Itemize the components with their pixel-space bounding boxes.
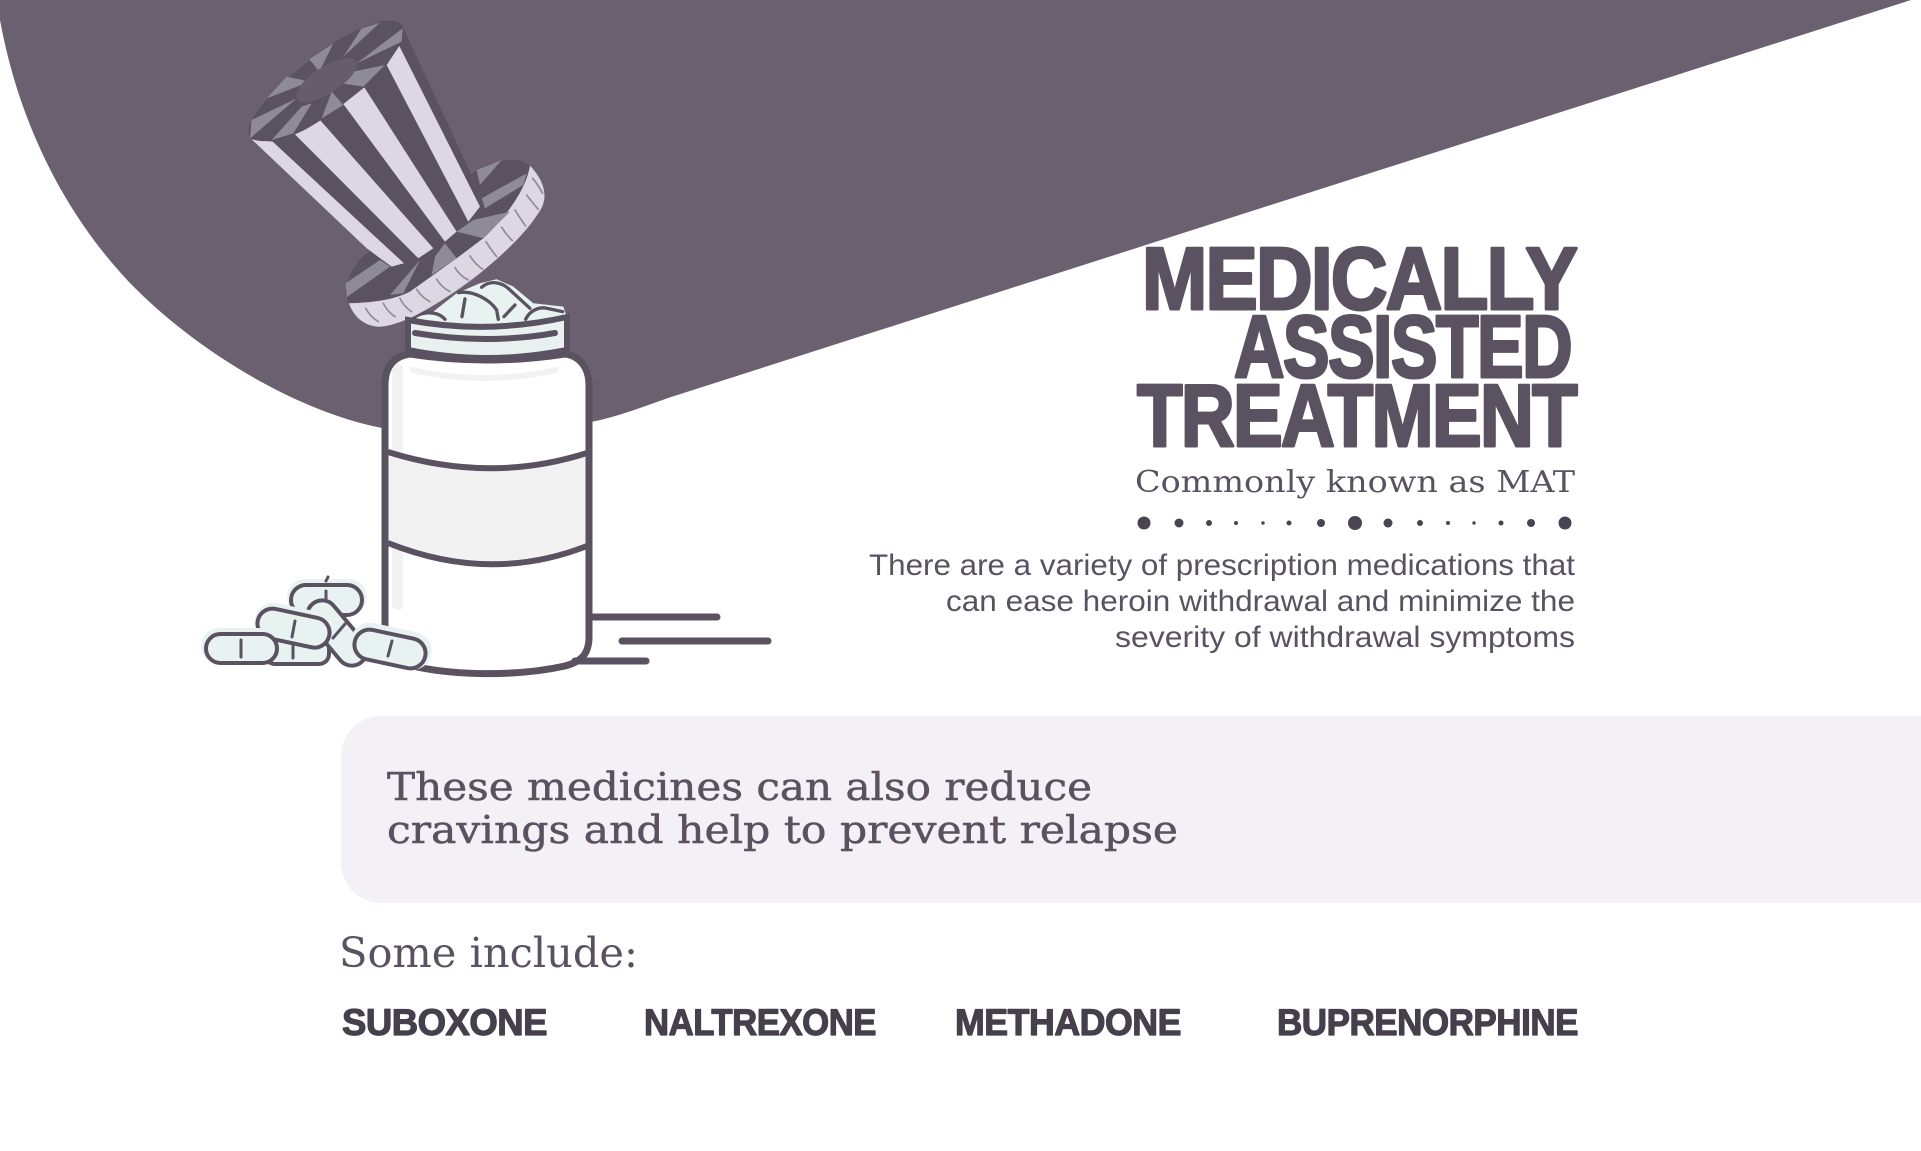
hat brim xyxy=(346,160,544,327)
heading: some include: Some include: xyxy=(339,929,638,977)
medication names: BUPRENORPHINE xyxy=(1277,1002,1578,1043)
icon: top hat xyxy=(249,21,544,327)
description text xyxy=(869,549,1576,654)
medication names: NALTREXONE xyxy=(644,1002,876,1043)
icon: spilled pills xyxy=(201,577,435,673)
medication names: SUBOXONE xyxy=(342,1002,547,1043)
title: MEDICALLY xyxy=(1142,229,1577,328)
medication names xyxy=(342,1002,1578,1043)
description text: severity of withdrawal symptoms xyxy=(1115,621,1575,654)
hat body xyxy=(251,27,482,267)
callout text: These medicines can also reduce xyxy=(387,765,1092,809)
hat crown top xyxy=(249,21,403,141)
description text: There are a variety of prescription medications that xyxy=(869,549,1576,582)
subtitle: Commonly known as MAT xyxy=(1135,465,1575,500)
motion lines xyxy=(575,617,768,661)
bottle cap xyxy=(408,317,567,358)
icon: pills in bottle opening xyxy=(410,279,567,328)
background swoosh xyxy=(0,0,1911,432)
medication names: METHADONE xyxy=(955,1002,1181,1043)
title: TREATMENT xyxy=(1137,366,1577,465)
icon: pill bottle xyxy=(385,317,768,674)
callout text xyxy=(387,765,1178,852)
dotted divider xyxy=(1138,516,1572,530)
bottle body xyxy=(385,354,589,674)
description text: can ease heroin withdrawal and minimize the xyxy=(946,585,1575,618)
callout text: cravings and help to prevent relapse xyxy=(387,808,1178,852)
title xyxy=(1137,229,1577,465)
title: ASSISTED xyxy=(1234,297,1571,396)
panel: callout xyxy=(341,716,1921,903)
